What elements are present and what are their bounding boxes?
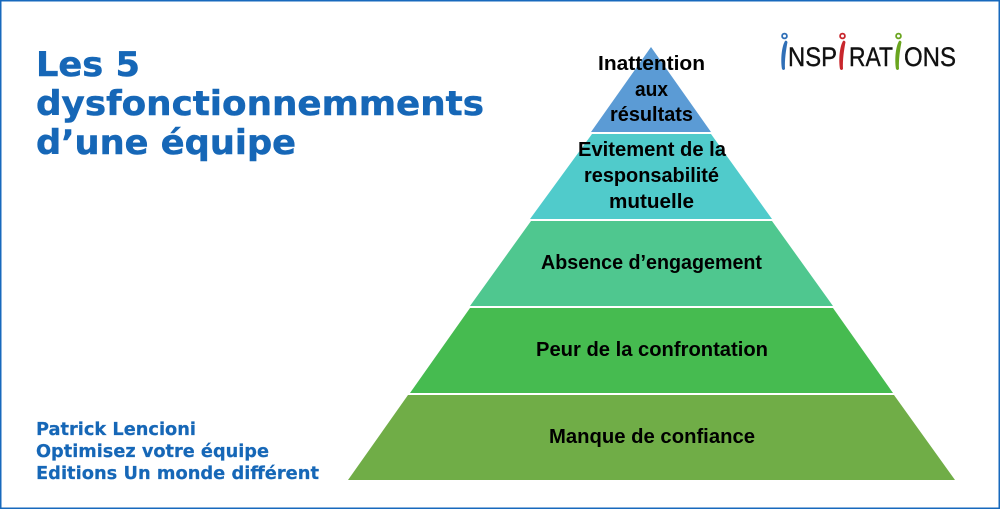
pyramid level 2: conflict: Peur de la confrontation — [536, 338, 768, 361]
title: Les 5 — [36, 45, 140, 85]
book reference text: Editions Un monde différent — [36, 464, 319, 484]
pyramid level 4: accountability: mutuelle — [609, 190, 694, 213]
icon: blue figure — [781, 34, 788, 70]
pyramid level 4: accountability: responsabilité — [584, 164, 719, 187]
pyramid level 3: commitment — [470, 221, 833, 306]
pyramid level 3: commitment: Absence d’engagement — [541, 251, 762, 274]
book reference text: Patrick Lencioni — [36, 420, 196, 440]
title — [36, 45, 484, 163]
pyramid level 5: results: Inattention — [598, 52, 705, 75]
pyramid level 1: trust — [348, 395, 955, 480]
pyramid level 5: results — [591, 47, 711, 132]
pyramid level 1: trust: Manque de confiance — [549, 425, 755, 448]
logo letters: RAT — [849, 42, 893, 72]
book reference text: Optimisez votre équipe — [36, 442, 269, 462]
logo letters — [788, 42, 956, 72]
pyramid level 4: accountability: Evitement de la — [578, 138, 727, 161]
logo letters: ONS — [904, 42, 956, 72]
pyramid level 2: conflict — [410, 308, 893, 393]
pyramid level 4: accountability — [530, 134, 772, 219]
logo letters: NSP — [788, 42, 837, 72]
icon: green figure — [895, 34, 902, 70]
pyramid level 5: results: résultats — [610, 103, 693, 126]
logo: Inspirations — [781, 34, 956, 72]
pyramid chart — [348, 47, 955, 480]
book reference text — [36, 420, 319, 484]
icon: red figure — [839, 34, 846, 70]
pyramid level 5: results: aux — [635, 78, 669, 101]
title: dysfonctionnemments — [36, 84, 484, 124]
title: d’une équipe — [36, 123, 296, 163]
